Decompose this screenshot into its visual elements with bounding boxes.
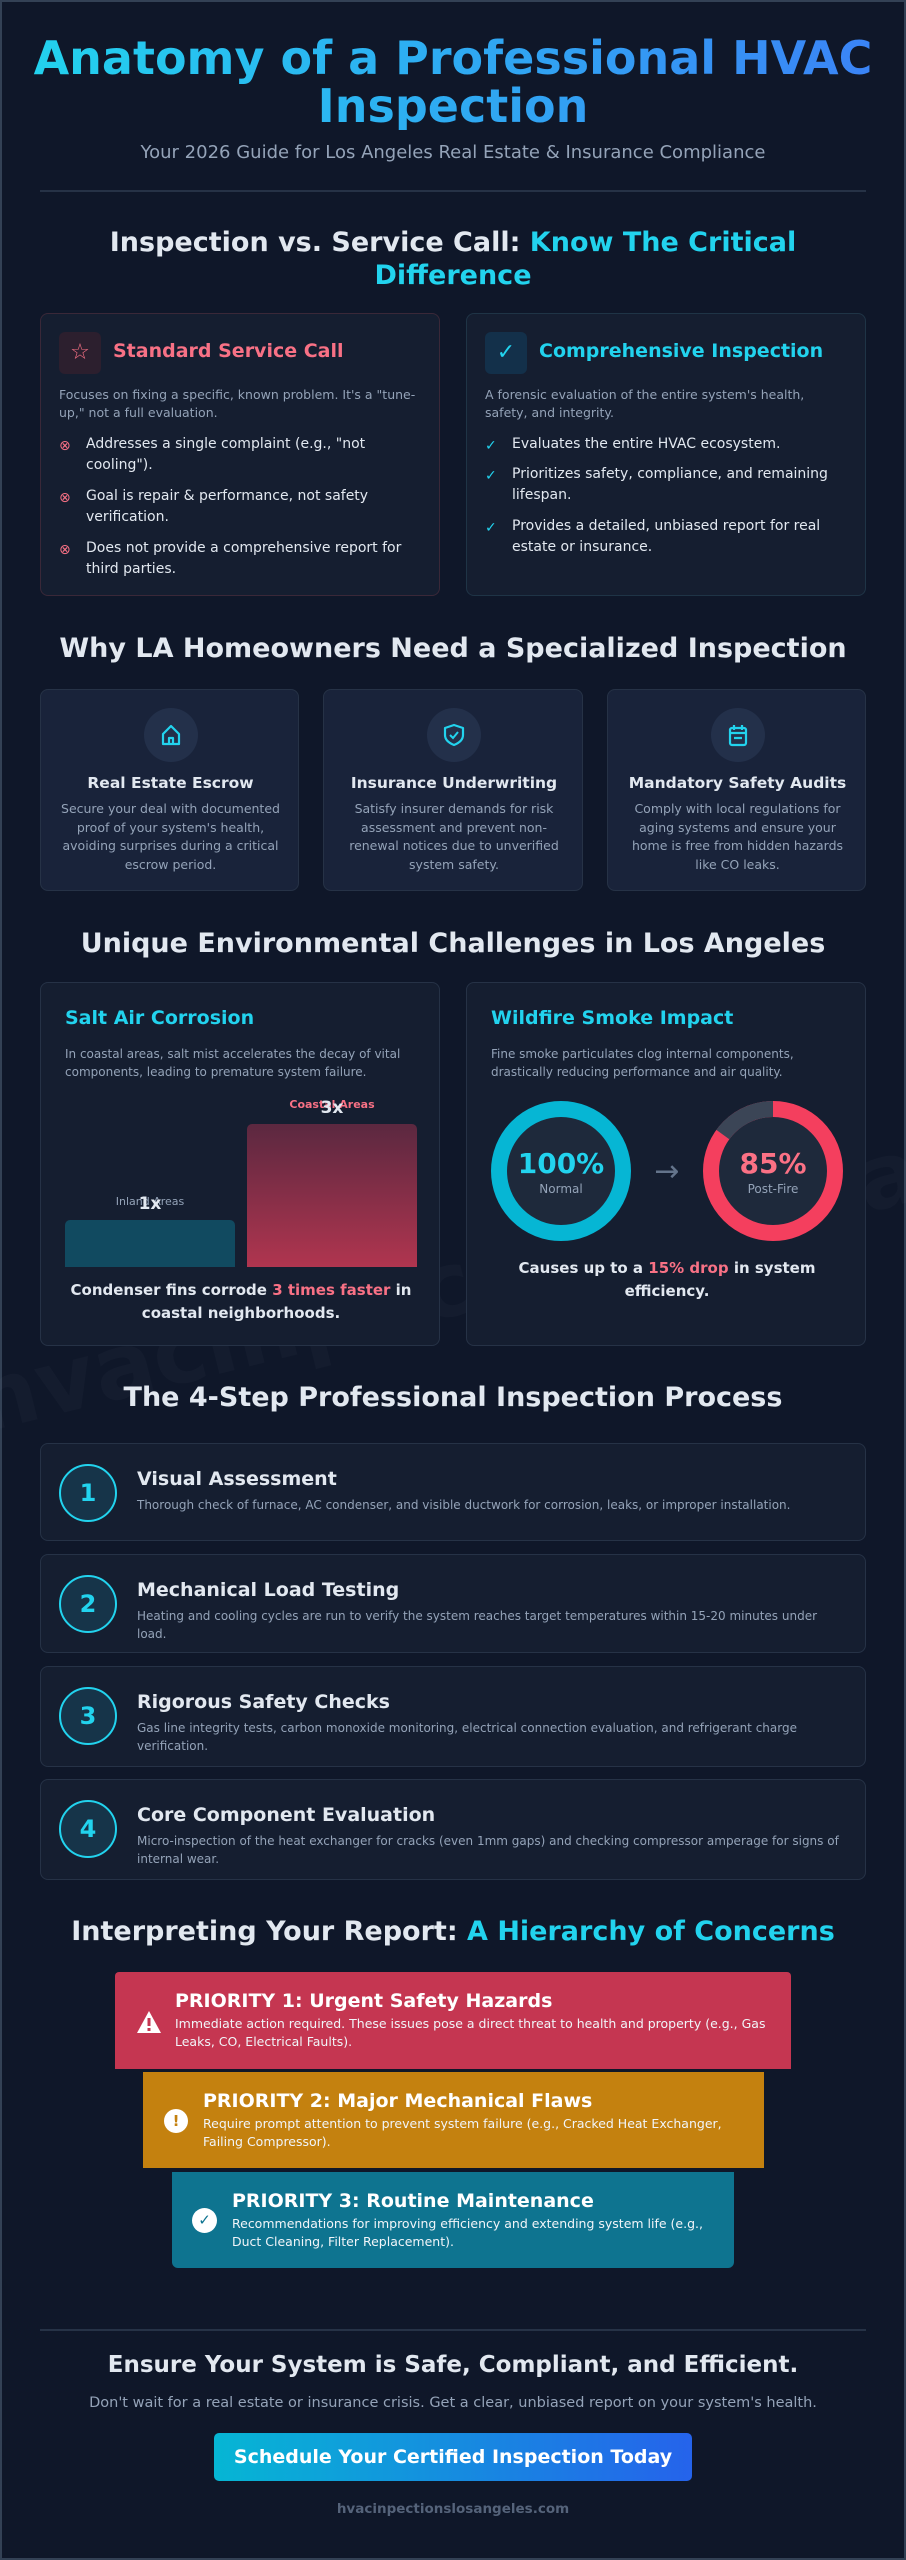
bullet list: ⊗	[59, 438, 71, 454]
card title: Mandatory Safety Audits	[629, 774, 846, 792]
card title: Standard Service Call	[113, 340, 344, 362]
step 2: Mechanical Load Testing	[137, 1579, 399, 1601]
bar chart: Inland Areas	[116, 1195, 184, 1208]
icon: check: ✓	[198, 2211, 211, 2229]
description: A forensic evaluation of the entire system's health, safety, and integrity.	[485, 387, 804, 420]
priority 3: PRIORITY 3: Routine Maintenance	[232, 2190, 594, 2212]
icon: star	[59, 332, 101, 374]
caption: Causes up to a 15% drop in system efficiency.	[519, 1259, 815, 1300]
heading: environmental challenges: Unique Environmental Challenges in Los Angeles	[81, 928, 825, 959]
bullet list: Prioritizes safety, compliance, and remaining lifespan.	[512, 466, 828, 503]
donut charts: Post-Fire	[748, 1182, 798, 1196]
CTA heading: Ensure Your System is Safe, Compliant, and Efficient.	[108, 2352, 798, 2378]
priority 3	[172, 2172, 734, 2268]
step 1: Visual Assessment	[137, 1468, 337, 1490]
heading: hierarchy: Interpreting Your Report: A Hierarchy of Concerns	[71, 1916, 835, 1947]
heading: why LA: Why LA Homeowners Need a Specialized Inspection	[59, 633, 847, 664]
step 3: Gas line integrity tests, carbon monoxide monitoring, electrical connection evaluation, and refrigerant charge verification.	[137, 1721, 797, 1753]
bullet list: Evaluates the entire HVAC ecosystem.	[512, 436, 780, 452]
bar chart: 1x	[139, 1194, 161, 1214]
card title: Insurance Underwriting	[351, 774, 557, 792]
step 3: Rigorous Safety Checks	[137, 1691, 390, 1713]
panel: salt air corrosion	[40, 982, 440, 1346]
panel: real estate escrow	[40, 689, 299, 891]
panel: mandatory safety audits	[607, 689, 866, 891]
CTA text: Don't wait for a real estate or insurance crisis. Get a clear, unbiased report on your system's health.	[89, 2395, 817, 2411]
donut charts	[491, 1101, 843, 1241]
card title: Real Estate Escrow	[87, 774, 254, 792]
bullet list: ✓	[485, 520, 497, 536]
bar chart: Coastal Areas	[289, 1098, 375, 1111]
priority 1: Immediate action required. These issues pose a direct threat to health and property (e.g., Gas Leaks, CO, Electrical Faults).	[175, 2016, 765, 2049]
donut charts: →	[654, 1154, 680, 1189]
icon: calendar	[711, 708, 765, 762]
bullet list	[485, 436, 828, 555]
description: Satisfy insurer demands for risk assessment and prevent non-renewal notices due to unverified system safety.	[349, 801, 559, 872]
donut charts: 85%	[739, 1147, 807, 1180]
panel: standard service call	[40, 313, 440, 596]
icon: house	[144, 708, 198, 762]
step 4: 4	[80, 1815, 96, 1843]
description: Comply with local regulations for aging systems and ensure your home is free from hidden hazards like CO leaks.	[632, 801, 843, 872]
panel: insurance underwriting	[323, 689, 583, 891]
bullet list	[59, 436, 402, 577]
bullet list: ⊗	[59, 490, 71, 506]
priority 2	[143, 2072, 764, 2168]
bullet list: Goal is repair & performance, not safety verification.	[86, 488, 368, 525]
priority 1	[115, 1972, 791, 2069]
heading: 4-step process: The 4-Step Professional Inspection Process	[124, 1382, 782, 1413]
bullet list: ✓	[485, 468, 497, 484]
bar chart	[65, 1098, 417, 1267]
description: In coastal areas, salt mist accelerates the decay of vital components, leading to premature system failure.	[65, 1047, 400, 1079]
step 2: 2	[80, 1590, 96, 1618]
description: Fine smoke particulates clog internal components, drastically reducing performance and air quality.	[491, 1047, 794, 1079]
donut charts: Normal	[539, 1182, 583, 1196]
icon: check circle	[485, 332, 527, 374]
description: Secure your deal with documented proof of your system's health, avoiding surprises during a critical escrow period.	[61, 801, 280, 872]
subtitle: Your 2026 Guide for Los Angeles Real Estate & Insurance Compliance	[141, 142, 765, 163]
bullet list: Provides a detailed, unbiased report for real estate or insurance.	[512, 518, 820, 555]
footer url: hvacinpectionslosangeles.com	[337, 2501, 569, 2517]
heading: inspection vs service: Inspection vs. Service Call: Know The Critical Difference	[110, 227, 796, 291]
CTA button	[214, 2433, 692, 2481]
panel: comprehensive inspection	[466, 313, 866, 596]
step 1	[40, 1443, 866, 1541]
step 3	[40, 1666, 866, 1767]
priority 3: Recommendations for improving efficiency and extending system life (e.g., Duct Cleaning, Filter Replacement).	[232, 2216, 703, 2249]
icon: shield	[427, 708, 481, 762]
bullet list: ⊗	[59, 542, 71, 558]
step 4: Core Component Evaluation	[137, 1804, 435, 1826]
priority 2: Require prompt attention to prevent system failure (e.g., Cracked Heat Exchanger, Failing Compressor).	[203, 2116, 722, 2149]
card title: Comprehensive Inspection	[539, 340, 823, 362]
bullet list: ✓	[485, 438, 497, 454]
caption: Condenser fins corrode 3 times faster in coastal neighborhoods.	[70, 1281, 411, 1322]
panel title: Salt Air Corrosion	[65, 1007, 254, 1029]
panel: wildfire smoke	[466, 982, 866, 1346]
step 1: 1	[80, 1479, 96, 1507]
description: Focuses on fixing a specific, known problem. It's a "tune-up," not a full evaluation.	[59, 387, 415, 420]
step 3: 3	[80, 1702, 96, 1730]
priority 1: PRIORITY 1: Urgent Safety Hazards	[175, 1990, 552, 2012]
icon: check	[192, 2208, 217, 2233]
donut charts: 100%	[518, 1147, 604, 1180]
step 4: Micro-inspection of the heat exchanger for cracks (even 1mm gaps) and checking compressor amperage for signs of internal wear.	[137, 1834, 839, 1866]
icon: check circle: ✓	[497, 340, 515, 365]
icon: star: ☆	[70, 340, 90, 365]
icon: exclamation: !	[173, 2112, 179, 2130]
step 2: Heating and cooling cycles are run to verify the system reaches target temperatures within 15-20 minutes under load.	[137, 1609, 817, 1641]
panel title: Wildfire Smoke Impact	[491, 1007, 733, 1029]
title: Anatomy of a Professional HVAC Inspection	[34, 31, 872, 133]
step 4	[40, 1779, 866, 1880]
bar chart: 3x	[321, 1098, 343, 1118]
priority 2: PRIORITY 2: Major Mechanical Flaws	[203, 2090, 592, 2112]
step 1: Thorough check of furnace, AC condenser, and visible ductwork for corrosion, leaks, or improper installation.	[137, 1498, 790, 1512]
icon: warning	[137, 2011, 161, 2033]
bullet list: Does not provide a comprehensive report for third parties.	[86, 540, 401, 577]
step 2	[40, 1554, 866, 1653]
CTA button: Schedule Your Certified Inspection Today	[234, 2446, 672, 2468]
icon: exclamation	[164, 2109, 188, 2133]
bullet list: Addresses a single complaint (e.g., "not cooling").	[86, 436, 365, 473]
